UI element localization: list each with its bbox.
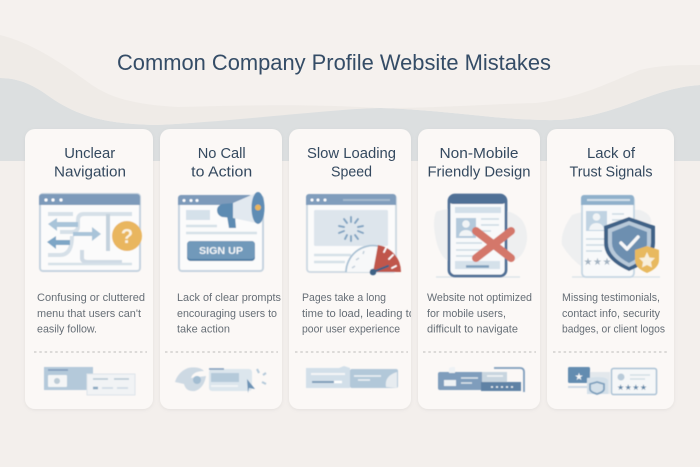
heading: unclear navigation: Navigation	[54, 164, 126, 180]
description: poor user experience	[302, 324, 400, 336]
panel: non-mobile friendly design	[418, 129, 540, 409]
thumbnail	[306, 366, 398, 388]
panel: no call to action	[160, 129, 282, 409]
heading: no call to action: No Call	[198, 145, 246, 162]
thumbnail	[438, 367, 524, 392]
heading: slow loading speed: Speed	[331, 164, 372, 180]
description: Pages take a long	[302, 292, 386, 304]
panel: lack of trust signals	[547, 129, 674, 409]
description: Website not optimized	[427, 292, 532, 304]
heading: non-mobile friendly design: Friendly Design	[428, 164, 530, 180]
icon: browser with megaphone and sign up button	[178, 192, 264, 271]
description: encouraging users to	[177, 308, 277, 320]
description: contact info, security	[562, 308, 660, 320]
icon: phone with red cross	[434, 195, 527, 277]
description: Lack of clear prompts	[177, 292, 281, 304]
panel: slow loading speed	[289, 129, 415, 409]
description: time to load, leading to	[302, 308, 415, 320]
icon: loading browser and speedometer	[306, 194, 401, 275]
description: for mobile users,	[427, 308, 506, 320]
title: Common Company Profile Website Mistakes	[117, 50, 551, 75]
heading: slow loading speed: Slow Loading	[307, 145, 396, 162]
thumbnail	[44, 367, 135, 395]
thumbnail: ★★★★	[617, 383, 647, 392]
panel: unclear navigation	[25, 129, 153, 409]
heading: lack of trust signals: Trust Signals	[570, 164, 652, 180]
icon: browser with megaphone and sign up button: SIGN UP	[199, 245, 243, 257]
heading: unclear navigation: Unclear	[64, 145, 115, 162]
thumbnail: ★	[575, 372, 584, 383]
description: menu that users can't	[37, 308, 141, 320]
heading: lack of trust signals: Lack of	[587, 145, 636, 162]
icon: confusing navigation browser	[39, 194, 142, 271]
description: Confusing or cluttered	[37, 292, 145, 304]
icon: confusing navigation browser: ?	[121, 226, 133, 248]
description: Missing testimonials,	[562, 292, 660, 304]
icon: shield with check, badge and profile document: ★★★	[584, 257, 612, 268]
description: easily follow.	[37, 324, 97, 336]
thumbnail	[175, 367, 266, 393]
description: difficult to navigate	[427, 324, 518, 336]
icon: shield with check, badge and profile document	[562, 195, 660, 277]
heading: no call to action: to Action	[191, 164, 252, 180]
thumbnail	[568, 367, 656, 394]
description: take action	[177, 324, 230, 336]
description: badges, or client logos	[562, 324, 665, 336]
heading: non-mobile friendly design: Non-Mobile	[440, 145, 518, 162]
